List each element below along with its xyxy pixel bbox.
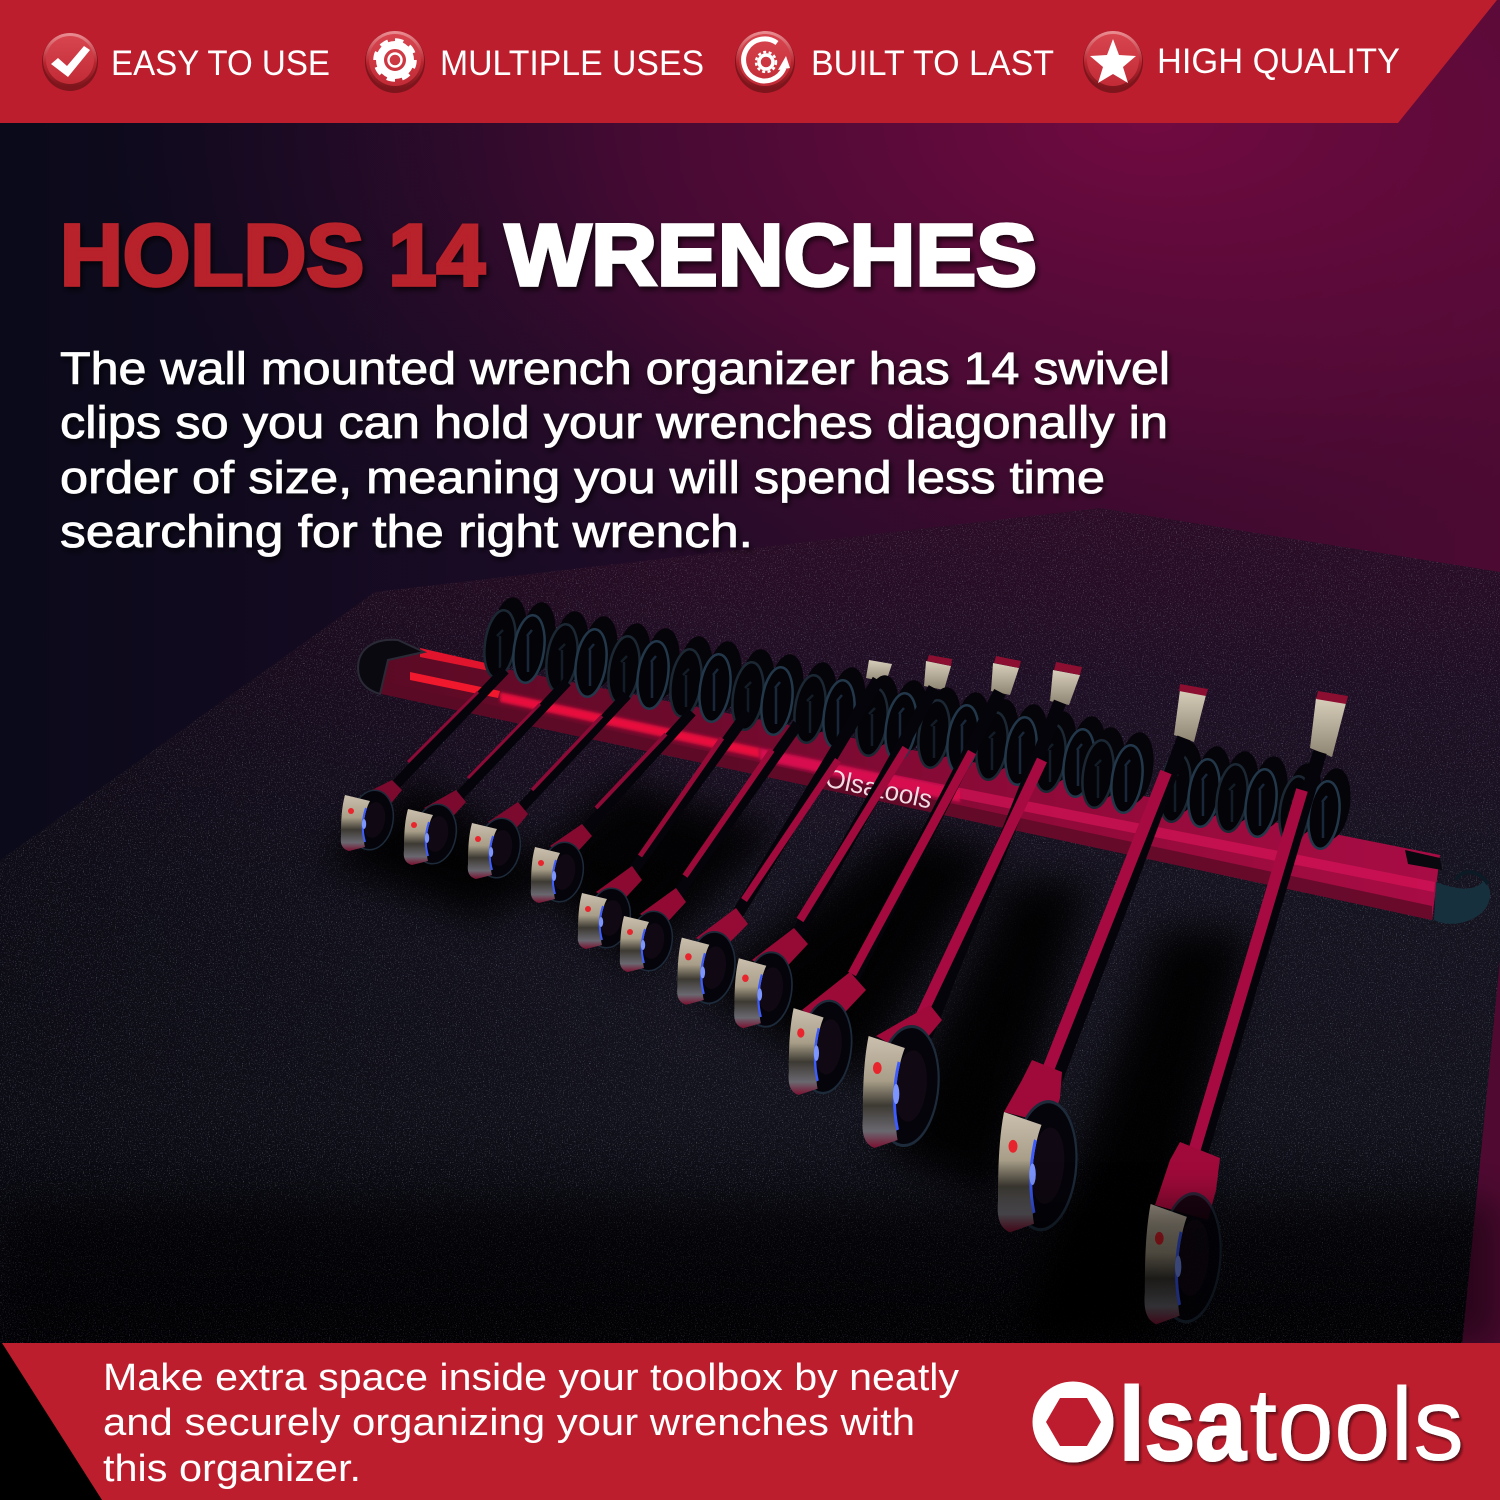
Olsatools logo: tools: [1249, 1367, 1464, 1483]
body paragraph: The wall mounted wrench organizer has 14 swivel: [60, 343, 1170, 394]
icon: star button: [1083, 31, 1143, 93]
wrench 11: [998, 738, 1184, 1237]
shadows cast on mat: [320, 780, 1250, 1345]
photo: wrench organizer on dark mat: [0, 508, 1500, 1345]
chrome wrench tips: [866, 655, 1348, 757]
heading: WRENCHES: [505, 207, 1037, 304]
Olsatools logo: lsa: [1119, 1367, 1247, 1483]
wrenches: [341, 670, 1320, 1329]
feature: multiple uses: [365, 31, 704, 93]
footer text: Make extra space inside your toolbox by neatly: [103, 1357, 959, 1399]
top red banner: [0, 0, 1497, 123]
rail end hook left: [358, 640, 424, 694]
footer text: this organizer.: [103, 1448, 361, 1490]
heading: [60, 207, 1037, 304]
feature: easy to use: [42, 33, 330, 91]
wrench 7: [677, 680, 878, 1007]
wrench 4: [531, 712, 692, 905]
icon: gear button: [365, 31, 425, 93]
label: BUILT TO LAST: [811, 44, 1054, 83]
body paragraph: clips so you can hold your wrenches diagonally in: [60, 397, 1168, 448]
wrench 12: [1144, 752, 1320, 1329]
feature: high quality: [1083, 31, 1400, 93]
wrench 9: [789, 692, 1000, 1098]
wrench 6: [620, 724, 798, 974]
body paragraph: searching for the right wrench.: [60, 506, 753, 557]
body paragraph: order of size, meaning you will spend less time: [60, 452, 1105, 503]
wrench 8: [734, 688, 934, 1031]
label: HIGH QUALITY: [1157, 42, 1400, 81]
wrench 5: [578, 712, 748, 951]
body paragraph: [60, 343, 1170, 557]
feature: built to last: [735, 31, 1054, 93]
icon: check mark button: [42, 33, 98, 91]
bottom vignette on photo: [0, 1200, 1500, 1345]
label: EASY TO USE: [111, 44, 330, 83]
foam mat: [0, 508, 1500, 1345]
label: MULTIPLE USES: [440, 44, 704, 83]
swivel clips (14): [480, 595, 1355, 851]
bottom red banner: [0, 1343, 1500, 1500]
Olsatools logo: [1032, 1367, 1464, 1483]
rail end hook right: [1405, 850, 1490, 924]
wrench 2: [404, 682, 567, 867]
wrench 10: [862, 702, 1060, 1152]
wrench 1: [341, 670, 505, 853]
footer text: and securely organizing your wrenches with: [103, 1402, 915, 1444]
footer text: [103, 1357, 959, 1490]
rail: [372, 645, 1440, 920]
rail logo text: Olsatools: [823, 763, 935, 814]
heading: HOLDS 14: [60, 207, 485, 304]
wrench 3: [468, 695, 627, 881]
icon: rotating gear button: [735, 31, 795, 93]
